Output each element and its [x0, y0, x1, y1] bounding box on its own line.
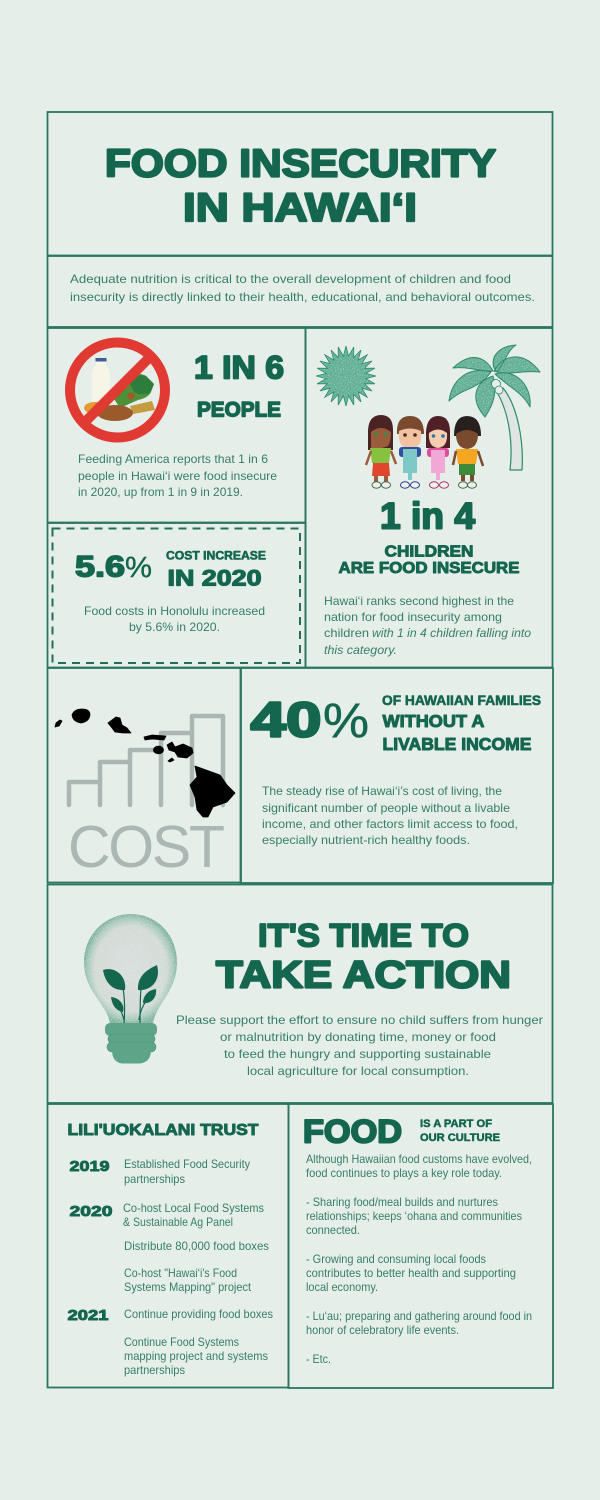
- panel: cost increase: [48, 523, 306, 668]
- body text: Although Hawaiian food customs have evolved,: [306, 1152, 532, 1166]
- timeline: 2019: partnerships: [124, 1172, 185, 1186]
- body text: especially nutrient-rich healthy foods.: [262, 833, 470, 847]
- timeline: 2020: Co-host Local Food Systems: [123, 1201, 264, 1215]
- body text: Hawai‘i ranks second highest in the: [324, 594, 514, 608]
- label: are food insecure: ARE FOOD INSECURE: [338, 560, 520, 577]
- body text: food continues to plays a key role today.: [306, 1166, 502, 1180]
- label: in 2020: IN 2020: [168, 566, 262, 590]
- timeline: 2019: Established Food Security: [124, 1157, 250, 1171]
- dashed frame: [52, 528, 300, 663]
- timeline: 2021: mapping project and systems: [124, 1349, 268, 1363]
- label: of Hawaiian families: OF HAWAIIAN FAMILIES: [382, 692, 541, 708]
- body text: this category.: [324, 643, 397, 657]
- body text: income, and other factors limit access to food,: [262, 817, 518, 831]
- body text: - Etc.: [306, 1352, 331, 1366]
- body text: significant number of people without a livable: [262, 801, 510, 815]
- heading: it's time to: IT'S TIME TO: [258, 918, 469, 954]
- body text: Feeding America reports that 1 in 6: [78, 452, 268, 466]
- panel: introduction: [48, 256, 552, 327]
- heading: trust: LILI'UOKALANI TRUST: [68, 1122, 259, 1139]
- body text: to feed the hungry and supporting sustainable: [224, 1047, 491, 1061]
- stat: 5.6 percent: %: [125, 552, 152, 584]
- body text: Please support the effort to ensure no child suffers from hunger: [176, 1013, 543, 1027]
- panel: 40 percent: [241, 668, 553, 883]
- icon: rising cost stairs: [69, 716, 223, 805]
- timeline: 2020: Co-host "Hawai‘i's Food: [124, 1266, 237, 1280]
- illustration: children: [366, 415, 483, 488]
- intro text: insecurity is directly linked to their health, educational, and behavioral outcomes.: [70, 290, 535, 304]
- heading: take action: TAKE ACTION: [216, 954, 511, 996]
- body text: contributes to better health and supporting: [306, 1266, 516, 1280]
- timeline: 2019: [70, 1157, 253, 1186]
- panel: take action: [48, 884, 552, 1103]
- body text: local economy.: [306, 1280, 378, 1294]
- intro text: Adequate nutrition is critical to the overall development of children and food: [70, 272, 511, 286]
- label: without a: WITHOUT A: [382, 711, 485, 731]
- label: livable income: LIVABLE INCOME: [382, 734, 532, 754]
- body text: - Growing and consuming local foods: [306, 1252, 486, 1266]
- timeline: 2021: partnerships: [124, 1363, 185, 1377]
- timeline: 2020: Systems Mapping" project: [124, 1280, 252, 1294]
- icon: palm tree: [449, 345, 540, 470]
- heading: food: FOOD: [303, 1114, 402, 1150]
- panel: cost graphic: [48, 668, 240, 882]
- stat: 1 in 6: 1 IN 6: [194, 350, 284, 386]
- timeline: 2019: 2019: [70, 1159, 110, 1175]
- body text: honor of celebratory life events.: [306, 1323, 459, 1337]
- timeline: 2021: 2021: [68, 1308, 108, 1324]
- stat: 40 percent: %: [323, 695, 369, 748]
- panel: 1 in 4 children: [306, 328, 552, 668]
- stat: 40 percent: 40: [250, 694, 322, 748]
- label: children: CHILDREN: [384, 544, 474, 560]
- timeline: 2021: [68, 1307, 276, 1377]
- body text: connected.: [306, 1223, 360, 1237]
- icon: Hawaiian islands: [55, 709, 235, 817]
- cost label: COST: [68, 814, 225, 880]
- body text: Food costs in Honolulu increased: [84, 604, 265, 618]
- heading: is a part of our culture: OUR CULTURE: [420, 1132, 500, 1144]
- body text: - Lu‘au; preparing and gathering around food in: [306, 1309, 532, 1323]
- panel: food culture: [288, 1104, 553, 1388]
- icon: sun: [316, 346, 376, 406]
- body text: children: [324, 626, 369, 640]
- label: cost increase: COST INCREASE: [166, 548, 266, 562]
- stat: 5.6 percent: [75, 550, 152, 584]
- timeline: 2020: [70, 1201, 272, 1294]
- stat: 5.6 percent: 5.6: [75, 550, 125, 584]
- body text: people in Hawai‘i were food insecure: [78, 469, 277, 483]
- icon: no food sign: [70, 342, 165, 438]
- body text: by 5.6% in 2020.: [129, 620, 220, 634]
- stat label: people: PEOPLE: [197, 398, 281, 422]
- body text: with 1 in 4 children falling into: [372, 626, 531, 640]
- body text: local agriculture for local consumption.: [247, 1064, 469, 1078]
- timeline: 2020: 2020: [70, 1203, 112, 1220]
- heading: food insecurity: FOOD INSECURITY: [105, 142, 496, 186]
- heading: in Hawaii: IN HAWAI‘I: [183, 186, 417, 230]
- timeline: 2021: Continue Food Systems: [124, 1335, 239, 1349]
- panel: 1 in 6 people: [48, 328, 306, 522]
- body text: in 2020, up from 1 in 9 in 2019.: [78, 485, 243, 499]
- icon: light bulb with leaves: [84, 914, 177, 1064]
- heading: is a part of our culture: IS A PART OF: [420, 1118, 492, 1130]
- stat: 1 in 4: 1 in 4: [380, 496, 475, 536]
- timeline: 2020: & Sustainable Ag Panel: [123, 1215, 233, 1229]
- body text: nation for food insecurity among: [324, 610, 502, 624]
- timeline: 2020: Distribute 80,000 food boxes: [124, 1239, 269, 1253]
- timeline: 2021: Continue providing food boxes: [124, 1307, 273, 1321]
- panel: Lili'uokalani Trust timeline: [48, 1104, 288, 1388]
- body text: The steady rise of Hawai‘i’s cost of living, the: [262, 784, 502, 798]
- panel: title: [48, 112, 552, 256]
- body text: - Sharing food/meal builds and nurtures: [306, 1195, 498, 1209]
- stat: 40 percent: [250, 694, 369, 748]
- body text: or malnutrition by donating time, money or food: [220, 1030, 496, 1044]
- body text: relationships; keeps ‘ohana and communities: [306, 1209, 522, 1223]
